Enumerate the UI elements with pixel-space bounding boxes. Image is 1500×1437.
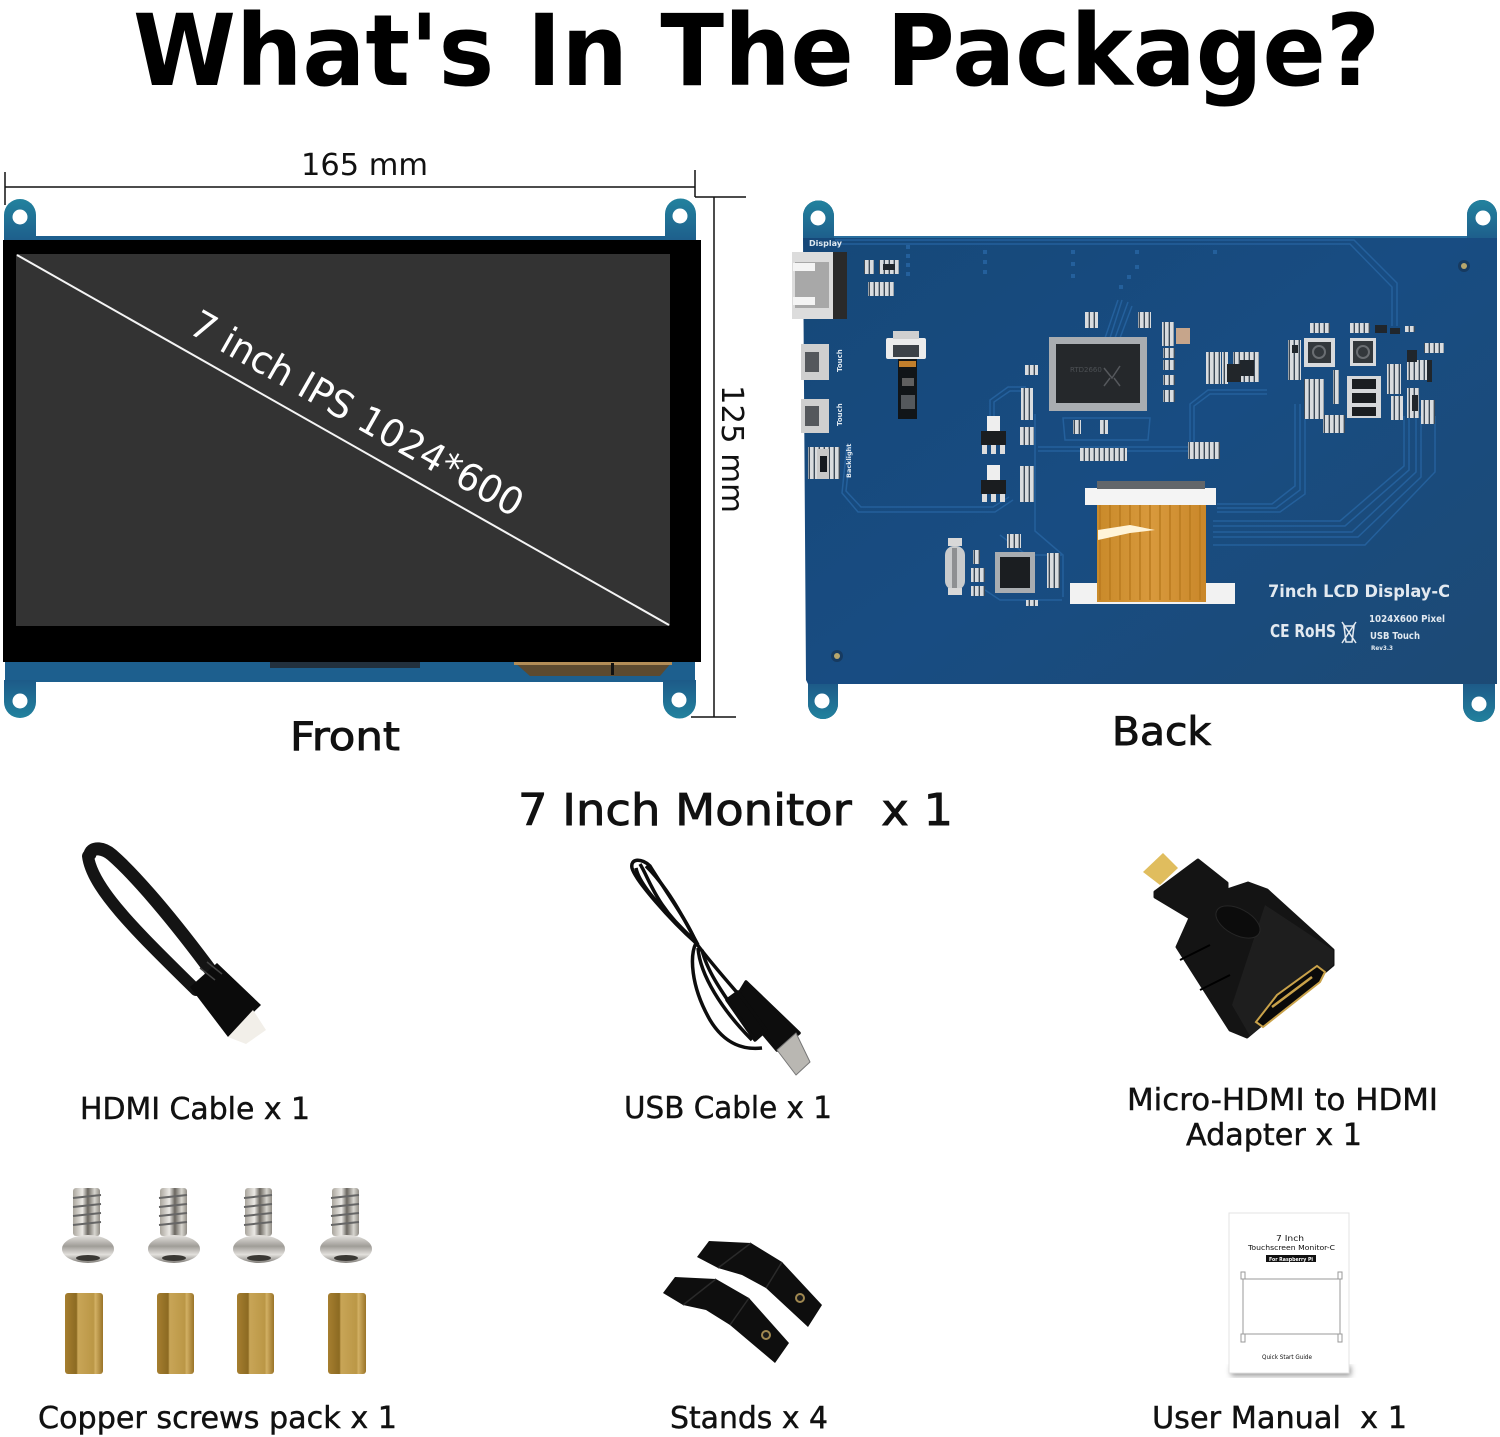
main chip: RTD2660 [1070,366,1102,374]
photo: stands [663,1241,822,1363]
voltage regulators [981,416,1006,502]
power inductors [1304,338,1376,367]
black bezel [3,240,701,662]
photo: usb cable [632,860,810,1075]
silkscreen: specs: USB Touch [1370,631,1420,642]
silkscreen: specs: Rev3.3 [1371,644,1393,652]
display ribbon connector [1070,481,1235,604]
screen diagonal [17,255,669,625]
silkscreen: board name: 7inch LCD Display-C [1268,582,1450,602]
crystal oscillator [945,538,965,595]
photo: user manual: Touchscreen Monitor-C [1247,1244,1335,1252]
small components [864,260,1444,606]
label: hdmi cable: HDMI Cable x 1 [80,1092,310,1127]
silkscreen: specs [1369,614,1445,652]
pcb via dots [906,245,1217,289]
hdmi port [792,252,847,319]
label: adapter: Micro-HDMI to HDMI [1127,1083,1438,1118]
front pcb with mounting tabs [4,198,696,718]
dark component marks [883,264,1432,411]
photo: hdmi cable [88,849,266,1044]
label: display: Display [809,239,843,248]
monitor front [3,198,701,718]
label: usb cable: USB Cable x 1 [624,1091,832,1126]
photo: brass standoffs [65,1293,366,1374]
dimension: height 125 mm: 125 mm [714,385,749,513]
photo: screws [62,1188,372,1263]
photo: micro-hdmi adapter [1143,853,1333,1037]
backlight switch: Backlight [845,444,853,478]
stacked diodes [1347,376,1381,418]
usb ports: Touch [836,403,844,426]
monitor back [792,200,1497,722]
pcb traces [835,240,1435,600]
small driver chip [1227,364,1241,382]
dimension: width 165 mm: 165 mm [301,148,428,183]
back pcb board [803,200,1497,722]
label: stands: Stands x 4 [670,1401,828,1436]
label: back: Back [1112,710,1211,755]
label: adapter [1127,1083,1438,1153]
label: front: Front [290,715,400,760]
backlight switch [808,444,853,479]
heading: monitor: 7 Inch Monitor x 1 [518,785,953,836]
screen [16,254,670,626]
silkscreen: specs: 1024X600 Pixel [1369,614,1445,625]
label: user manual: User Manual x 1 [1152,1401,1407,1436]
photo: user manual: 7 Inch [1276,1234,1304,1243]
main chip [1049,337,1147,411]
screen size label: 7 inch IPS 1024*600 [183,302,531,526]
usb ports [801,344,844,433]
photo: user manual: For Raspberry Pi [1269,1257,1313,1263]
touch controller chip [995,552,1035,593]
photo: user manual [1229,1213,1351,1376]
indicator led [1176,328,1190,344]
small fpc connector [886,331,926,419]
label: copper screws: Copper screws pack x 1 [38,1401,397,1436]
label: adapter: Adapter x 1 [1186,1118,1362,1153]
usb ports: Touch [836,349,844,372]
silkscreen: certification marks: CE RoHS [1270,621,1336,642]
photo: user manual: Quick Start Guide [1262,1354,1312,1361]
